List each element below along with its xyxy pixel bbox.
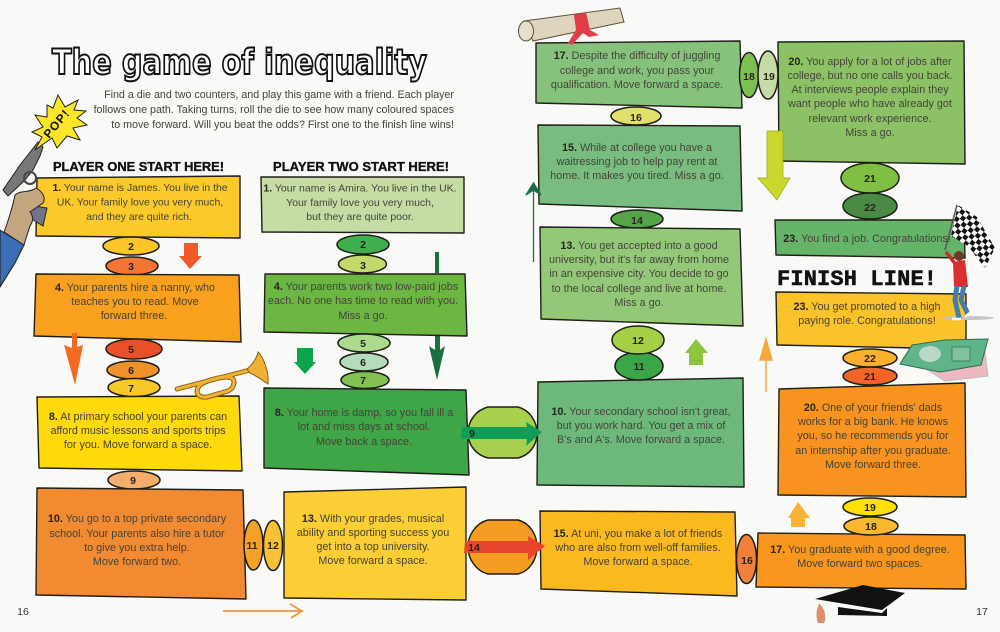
panel: player one step 10: to give you extra help. (84, 542, 190, 554)
space 7 (108, 378, 160, 396)
icon: diploma scroll (518, 8, 624, 45)
panel: player two step 1: Your family love you very much, (286, 197, 434, 209)
space 6 (340, 353, 388, 371)
panel: player one step 1: and they are quite rich. (86, 212, 192, 223)
panel: player one step 20: an internship after you graduate. (795, 445, 951, 457)
panel: player two step 13: university, but it's far away from home (549, 254, 729, 266)
panel: player one step 15: 15. At uni, you make a lot of friends (554, 528, 722, 540)
heading: player one: PLAYER ONE START HERE! (53, 159, 224, 174)
panel: player one step 4: teaches you to read. Move (71, 296, 199, 308)
space 11: 11 (246, 540, 258, 552)
arrow: orange block (179, 243, 202, 269)
panel: player two step 8 (264, 388, 469, 475)
page number 17: 17 (976, 606, 988, 618)
page number 16: 16 (17, 606, 29, 618)
panel: player two step 13: to the local college and live at home. (552, 283, 726, 295)
space 12 (264, 520, 282, 570)
panel: player one step 8 (37, 396, 242, 471)
panel: player two step 15: home. It makes you tired. Miss a go. (550, 170, 724, 182)
space 21: 21 (864, 173, 876, 185)
panel: player two step 4: Miss a go. (338, 310, 388, 322)
space 18: 18 (865, 521, 877, 533)
icon: person with chequered flag (942, 205, 995, 320)
panel: player two step 8: 8. Your home is damp, so you fall ill a (275, 407, 453, 419)
space 19: 19 (763, 71, 775, 83)
space 9: 9 (130, 475, 136, 487)
icon: banknotes (900, 339, 988, 381)
panel: player two step 23 (775, 220, 965, 258)
panel: player one step 10: 10. You go to a top private secondary (48, 513, 226, 525)
heading: finish line: FINISH LINE! (777, 267, 937, 292)
panel: player one step 4 (34, 274, 241, 342)
arrow: long orange (64, 333, 83, 385)
arrow: green block (294, 348, 316, 374)
icon: trumpet (177, 352, 268, 397)
panel: player two step 8: Move back a space. (316, 436, 412, 448)
arrow: light green up (685, 339, 708, 365)
icon: graduation cap (815, 585, 905, 623)
panel: player one step 4: forward three. (101, 310, 167, 322)
panel: player two step 15 (538, 125, 742, 211)
panel: player one step 17: Move forward two spaces. (797, 558, 923, 570)
space 6 (107, 361, 159, 379)
space 12: 12 (267, 540, 279, 552)
panel: player one step 13: get into a top university. (316, 541, 430, 553)
space 9 with arrow: 9 (469, 428, 475, 440)
panel: player two step 17 (536, 41, 742, 108)
panel: player two step 1: but they are quite poor. (306, 211, 414, 223)
space 2 (103, 237, 159, 255)
panel: player one step 17: 17. You graduate with a good degree. (770, 544, 950, 556)
panel: player one step 20 (778, 383, 966, 497)
space 19 (758, 51, 778, 99)
intro text: to move forward. Will you beat the odds? First one to the finish line wins! (111, 119, 454, 131)
panel: player two step 4: each. No one has time to read with you. (268, 295, 458, 307)
panel: player one step 10: Move forward two. (93, 556, 181, 568)
space 3: 3 (360, 260, 366, 272)
panel: player two step 20: Miss a go. (845, 127, 895, 139)
space 12 (612, 326, 664, 354)
space 7 (341, 372, 389, 388)
panel: player two step 13 (540, 227, 743, 326)
panel: player one step 8: 8. At primary school your parents can (49, 411, 227, 423)
arrow: yellow-green down (758, 131, 790, 200)
panel: player one step 10: school. Your parents also hire a tutor (49, 528, 225, 540)
space 2 (337, 235, 389, 254)
panel: player one step 15 (540, 511, 737, 596)
space 21 (841, 163, 899, 193)
panel: player two step 15: 15. While at college you have a (562, 142, 712, 154)
panel: player one step 23 (776, 292, 966, 349)
panel: player one step 20: works for a big bank. He knows (797, 416, 949, 428)
panel: player two step 13: in an expensive city. You decide to go (549, 268, 729, 280)
panel: player two step 13: Miss a go. (614, 297, 664, 309)
space 3: 3 (128, 261, 134, 273)
panel: player one step 1 (36, 176, 240, 238)
space 18 (844, 517, 898, 535)
icon: pop burst: POP! (41, 106, 73, 141)
space 18: 18 (743, 71, 755, 83)
panel: player one step 1: UK. Your family love you very much, (57, 198, 223, 208)
space 18 (740, 52, 758, 98)
panel: player two step 17: 17. Despite the difficulty of juggling (554, 50, 720, 62)
space 5: 5 (128, 344, 134, 356)
panel: player two step 20: college, but no one calls you back. (787, 70, 953, 82)
space 16: 16 (741, 555, 753, 567)
panel: player one step 20: you, so he recommends you for (797, 430, 949, 442)
space 3 (338, 255, 386, 273)
panel: player one step 20: 20. One of your friends' dads (804, 402, 942, 414)
panel: player one step 13: Move forward a space. (318, 555, 428, 567)
space 12: 12 (632, 335, 644, 347)
space 22 (843, 349, 897, 367)
panel: player one step 17 (756, 533, 966, 589)
space 21 (843, 367, 897, 385)
panel: player two step 10: 10. Your secondary school isn't great, (551, 406, 731, 418)
panel: player one step 1: 1. Your name is James. You live in the (52, 183, 228, 194)
space 5: 5 (360, 338, 366, 350)
panel: player two step 1 (261, 177, 464, 233)
panel: player two step 1: 1. Your name is Amira. You live in the UK. (263, 182, 457, 194)
space 3 (106, 257, 158, 275)
arrow: yellow-orange up (788, 502, 810, 527)
panel: player two step 13: 13. You get accepted into a good (560, 240, 718, 252)
panel: player two step 17: college and work, you pass your (560, 65, 715, 77)
space 14 (611, 210, 663, 228)
space 21: 21 (864, 371, 876, 383)
panel: player two step 20: 20. You apply for a lot of jobs after (788, 56, 952, 68)
space 9 (108, 471, 160, 489)
panel: player two step 4 (264, 274, 467, 336)
panel: player two step 10: B's and A's. Move forward a space. (557, 434, 725, 446)
title: The game of inequality (52, 43, 427, 83)
panel: player one step 8: afford music lessons and sports trips (50, 425, 226, 437)
panel: player two step 20: want people who have already got (787, 98, 952, 110)
space 6: 6 (360, 357, 366, 369)
panel: player one step 8: for you. Move forward a space. (64, 439, 212, 451)
space 11 (244, 520, 263, 570)
panel: player one step 13 (284, 487, 466, 600)
arrow: dark green long (429, 252, 445, 380)
panel: player one step 4: 4. Your parents hire a nanny, who (55, 282, 215, 294)
space 19: 19 (864, 502, 876, 514)
panel: player two step 10 (537, 378, 744, 487)
space 22: 22 (864, 202, 876, 214)
space 16: 16 (630, 112, 642, 124)
intro text: follows one path. Taking turns, roll the die to see how many coloured spaces (94, 104, 454, 116)
space 16 (611, 107, 661, 125)
space 5 (106, 339, 162, 359)
panel: player two step 4: 4. Your parents work two low-paid jobs (274, 281, 458, 293)
heading: player two: PLAYER TWO START HERE! (273, 159, 449, 174)
panel: player two step 17: qualification. Move forward a space. (551, 79, 723, 91)
arrow: dark green thin up (526, 183, 541, 262)
panel: player two step 10: but you work hard. You get a mix of (557, 420, 726, 432)
space 22 (843, 193, 897, 219)
panel: player two step 15: waitressing job to help pay rent at (556, 156, 717, 168)
panel: player two step 8: lot and miss days at school. (298, 421, 430, 433)
panel: player one step 15: who are also from well-off families. (554, 542, 721, 554)
panel: player one step 13: 13. With your grades, musical (302, 513, 444, 525)
space 16 (736, 534, 756, 584)
panel: player two step 20: relevant work experience. (808, 113, 932, 125)
panel: player one step 23: 23. You get promoted to a high (793, 301, 941, 313)
panel: player one step 15: Move forward a space. (583, 556, 693, 568)
space 14: 14 (631, 215, 643, 227)
intro text: Find a die and two counters, and play this game with a friend. Each player (104, 89, 454, 101)
space 6: 6 (128, 365, 134, 377)
icon: pop burst (32, 95, 87, 150)
space 5 (338, 334, 390, 352)
arrow: thin orange up (760, 339, 772, 392)
panel: player two step 20: At interviews people explain they (791, 84, 949, 96)
space 7: 7 (128, 383, 134, 395)
panel: player one step 10 (36, 488, 246, 599)
space 11: 11 (633, 361, 645, 373)
panel: player one step 13: ability and sporting success you (297, 527, 449, 539)
space 11 (615, 352, 663, 380)
panel: player one step 23: paying role. Congratulations! (798, 315, 936, 327)
space 9 with arrow (461, 407, 542, 458)
arrow: thin orange right (223, 604, 302, 618)
space 14 with arrow (464, 520, 545, 574)
panel: player one step 20: Move forward three. (825, 459, 921, 471)
space 14 with arrow: 14 (468, 542, 480, 554)
space 22: 22 (864, 353, 876, 365)
space 19 (843, 498, 897, 516)
space 7: 7 (360, 375, 366, 387)
space 2: 2 (128, 241, 134, 253)
icon: hand holding gun (0, 142, 47, 287)
space 2: 2 (360, 239, 366, 251)
panel: player two step 20 (778, 41, 965, 164)
panel: player two step 23: 23. You find a job. Congratulations! (783, 233, 951, 245)
